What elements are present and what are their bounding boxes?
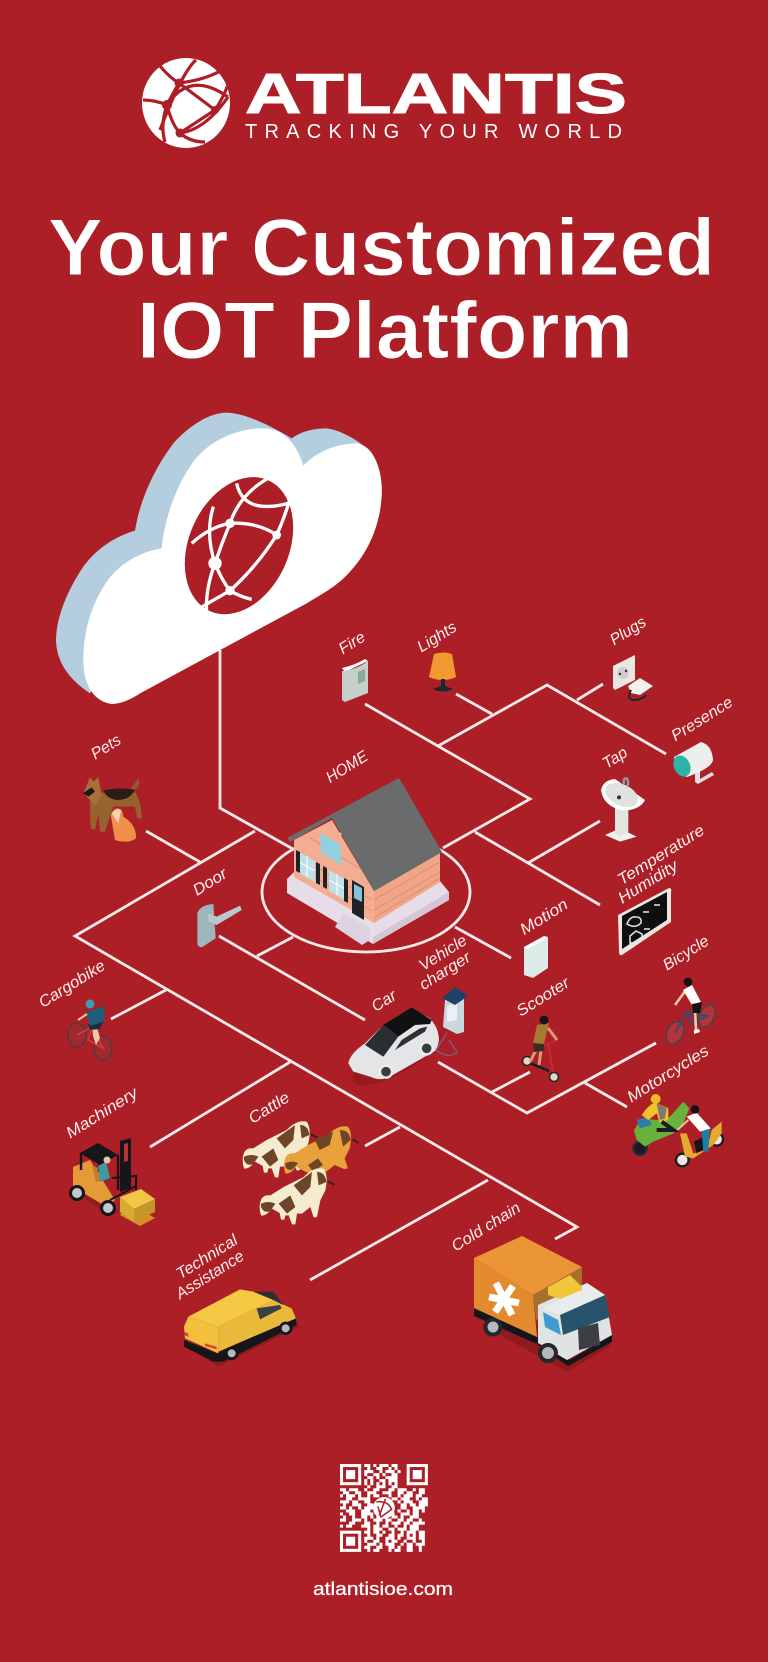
icon: sink [601, 778, 645, 842]
label: Humidity: Humidity [615, 857, 682, 907]
icon: fire sensor [342, 659, 368, 702]
title: Your Customized [48, 203, 715, 293]
icon: logo globe [142, 58, 230, 148]
truck cab [538, 1283, 612, 1360]
label: Lights: Lights [415, 619, 460, 656]
icon: motion sensor [524, 936, 548, 978]
title: IOT Platform [137, 286, 633, 376]
cow 3 [260, 1168, 335, 1224]
label: Motion: Motion [517, 896, 571, 939]
website URL: atlantisioe.com [313, 1578, 453, 1599]
network connection lines [75, 650, 666, 1280]
icon: door handle [197, 904, 242, 947]
logo tagline: TRACKING YOUR WORLD [245, 121, 622, 143]
label: Vehicle: Vehicle [416, 932, 470, 975]
cloud back face [56, 413, 373, 693]
house roof [287, 778, 442, 891]
icon: cattle [243, 1121, 360, 1224]
label: Car: Car [369, 987, 400, 1016]
logo: Atlantis [142, 58, 627, 148]
label: charger: charger [417, 949, 475, 994]
label: Technical: Technical [174, 1232, 241, 1283]
house walls [294, 820, 374, 923]
label: Tap: Tap [600, 744, 631, 773]
truck rear wheel [486, 1320, 500, 1334]
QR code [340, 1466, 428, 1550]
icon: cargobike [68, 1000, 112, 1060]
truck front wheel [540, 1345, 556, 1361]
truck shadow [482, 1325, 612, 1372]
icon: car [345, 1007, 448, 1096]
label: Door: Door [190, 865, 231, 899]
cow 1 [243, 1121, 318, 1177]
cloud front face [83, 428, 382, 704]
icon: forklift [70, 1138, 155, 1226]
house base [287, 872, 449, 944]
truck roof unit [548, 1275, 582, 1299]
icon: cold chain truck [474, 1236, 612, 1372]
label: Bicycle: Bicycle [660, 933, 712, 974]
green motorcycle [633, 1094, 689, 1155]
icon: wall plug [613, 655, 653, 700]
house steps [335, 913, 370, 945]
icon: motorcycles [633, 1094, 723, 1166]
label: HOME: HOME [323, 748, 372, 787]
icon: scooter rider [522, 1016, 558, 1082]
label: Cattle: Cattle [246, 1089, 293, 1128]
truck snowflake [489, 1283, 519, 1315]
title [48, 203, 715, 376]
label: Scooter: Scooter [514, 974, 573, 1020]
label: Plugs: Plugs [607, 614, 649, 649]
yellow scooter [676, 1105, 723, 1166]
logo wordmark: ATLANTIS [245, 62, 627, 126]
label: Cargobike: Cargobike [36, 957, 109, 1012]
label: Presence: Presence [669, 694, 736, 745]
cow 2 [284, 1126, 360, 1174]
icon: cloud [56, 413, 382, 704]
label: Motorcycles: Motorcycles [624, 1043, 712, 1106]
label: Machinery: Machinery [63, 1084, 142, 1142]
label: Temperature: Temperature [615, 822, 708, 889]
label: Assistance: Assistance [172, 1248, 247, 1304]
label: Fire: Fire [336, 629, 369, 658]
icon: van [184, 1289, 300, 1367]
label: Pets: Pets [88, 732, 124, 763]
icon: presence camera [670, 742, 714, 784]
icon: bicycle rider [663, 978, 718, 1047]
truck chassis [474, 1308, 612, 1366]
icon: thermostat display [618, 888, 671, 955]
label: Cold chain: Cold chain [449, 1199, 524, 1255]
icon: house [287, 778, 449, 945]
icon: dog and cat [83, 777, 142, 842]
house windows [320, 833, 342, 865]
truck box [474, 1236, 582, 1295]
cloud globe [164, 460, 314, 631]
house door [352, 880, 364, 920]
icon: lamp [429, 652, 456, 692]
icon: vehicle charger [436, 987, 468, 1056]
